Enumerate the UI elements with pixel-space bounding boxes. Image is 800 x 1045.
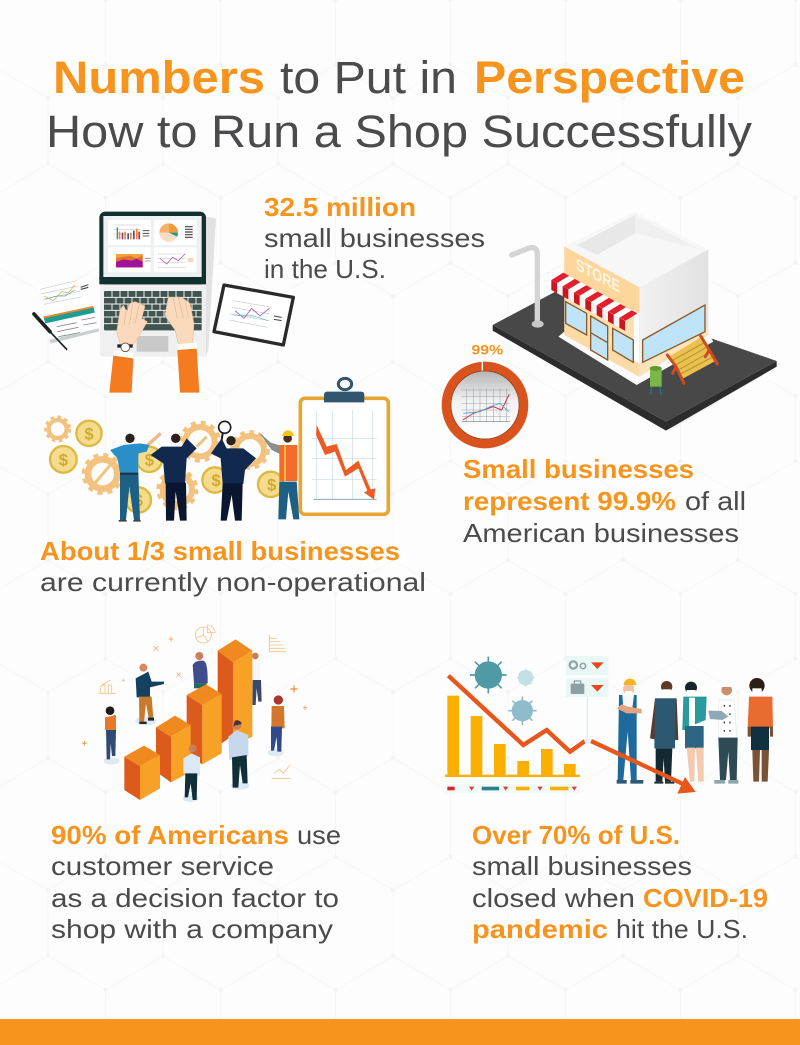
coin dollar signs: $	[84, 424, 94, 443]
worker in overalls	[617, 679, 643, 784]
text block: 90% of Americans: shop with a company	[51, 914, 333, 944]
bar chart	[445, 696, 580, 777]
bar 4	[218, 639, 252, 747]
person with magnifying glass	[211, 421, 256, 521]
large decline arrow	[591, 741, 696, 794]
gears	[46, 417, 268, 508]
person in navy sweater	[135, 664, 164, 725]
coin dollar signs: $	[211, 471, 221, 490]
text block: 32.5 million: 32.5 million	[264, 192, 416, 222]
chart legend strip	[445, 784, 580, 793]
person behind third bar	[193, 652, 208, 688]
woman in orange, left	[104, 706, 120, 765]
illustration: isometric store	[442, 212, 781, 448]
text block: over 70% closed: closed when	[472, 883, 635, 913]
title: How to Run a Shop Successfully	[46, 106, 753, 157]
street platform	[493, 287, 781, 431]
screen area chart	[116, 254, 151, 267]
store sign: STORE	[576, 254, 620, 297]
text block: 90% of Americans: 90% of Americans	[51, 820, 289, 850]
coin dollar signs	[59, 424, 277, 510]
screen pie chart	[159, 223, 193, 242]
bar 2	[156, 716, 191, 782]
street lamp	[512, 247, 544, 328]
title: to Put in	[280, 52, 457, 103]
text block: about 1/3 small businesses	[40, 536, 426, 597]
screen bar chart	[113, 225, 149, 239]
virus icons	[470, 657, 537, 725]
text block: 99.9% of American businesses: Small businesses	[463, 454, 694, 484]
store building	[558, 212, 713, 385]
coin dollar signs: $	[267, 475, 277, 494]
text block: 99.9% of American businesses: American businesses	[463, 518, 739, 548]
donut chart 99%: 99%	[471, 343, 503, 358]
illustration: laptop with charts and hands	[34, 212, 293, 393]
title: Perspective	[474, 52, 745, 103]
worker in apron	[650, 681, 678, 784]
text block: 32.5 million: small businesses	[264, 223, 485, 253]
illustration: covid decline chart and workers	[445, 656, 773, 794]
laptop body	[99, 212, 216, 357]
small chart icons	[82, 625, 307, 778]
coin dollar signs: $	[145, 450, 155, 469]
text block: 90% of Americans: as a decision factor to	[51, 883, 339, 913]
text block: 99.9% of American businesses: of all	[685, 486, 746, 516]
windows and door	[566, 302, 705, 362]
illustration: isometric bars and people	[82, 625, 307, 802]
trackpad	[137, 336, 168, 352]
coin dollar signs: $	[59, 450, 69, 469]
decline line	[448, 676, 585, 752]
footer bar	[0, 1019, 800, 1045]
text block: over 70% closed: hit the U.S.	[616, 914, 748, 944]
screen line chart	[157, 254, 193, 267]
bench	[667, 336, 717, 383]
awning	[551, 273, 637, 331]
tablet	[214, 285, 293, 345]
text block: about 1/3 small businesses: are currently non-operational	[40, 567, 426, 597]
papers with charts and pen	[34, 280, 99, 349]
person in blue shirt	[110, 433, 161, 522]
coins	[50, 421, 283, 513]
worker in teal jacket	[682, 682, 707, 782]
construction worker	[258, 430, 299, 519]
text block: 32.5 million	[264, 192, 485, 284]
text block: over 70% closed: small businesses	[472, 851, 692, 881]
title: Numbers	[53, 52, 265, 103]
left hand and sleeve	[109, 302, 147, 393]
text block: 32.5 million: in the U.S.	[264, 254, 386, 284]
text block: over 70% closed	[472, 820, 768, 944]
bar 1	[124, 746, 160, 800]
clipboard with falling chart	[300, 378, 388, 514]
tall person in front, blue shirt	[228, 720, 249, 790]
callout with down indicators	[566, 656, 608, 744]
chef with tablet	[708, 684, 738, 784]
donut chart 99%	[442, 343, 528, 448]
text block: 90% of Americans: use	[297, 820, 341, 850]
text block: over 70% closed: pandemic	[472, 914, 608, 944]
worker in orange jacket	[748, 678, 773, 782]
text block: 90% of Americans	[51, 820, 341, 944]
bar 3	[187, 684, 222, 764]
text block: about 1/3 small businesses: About 1/3 small businesses	[40, 536, 400, 566]
illustration: people, gears and falling chart	[46, 378, 388, 522]
person in front, light shirt	[183, 744, 200, 802]
keyboard	[104, 291, 202, 330]
coin dollar signs: $	[134, 491, 144, 510]
person behind tallest bar	[252, 653, 262, 705]
woman in orange, right	[268, 695, 285, 756]
right hand and sleeve	[165, 297, 199, 393]
text block: 99.9% of American businesses	[463, 454, 746, 548]
text block: over 70% closed: Over 70% of U.S.	[472, 820, 680, 850]
person in navy suit, hand on head	[151, 434, 197, 521]
text block: over 70% closed: COVID-19	[643, 883, 768, 913]
text block: 90% of Americans: customer service	[51, 851, 274, 881]
trash can	[650, 366, 662, 395]
text block: 99.9% of American businesses: represent 99.9%	[463, 486, 676, 516]
title	[46, 52, 753, 157]
